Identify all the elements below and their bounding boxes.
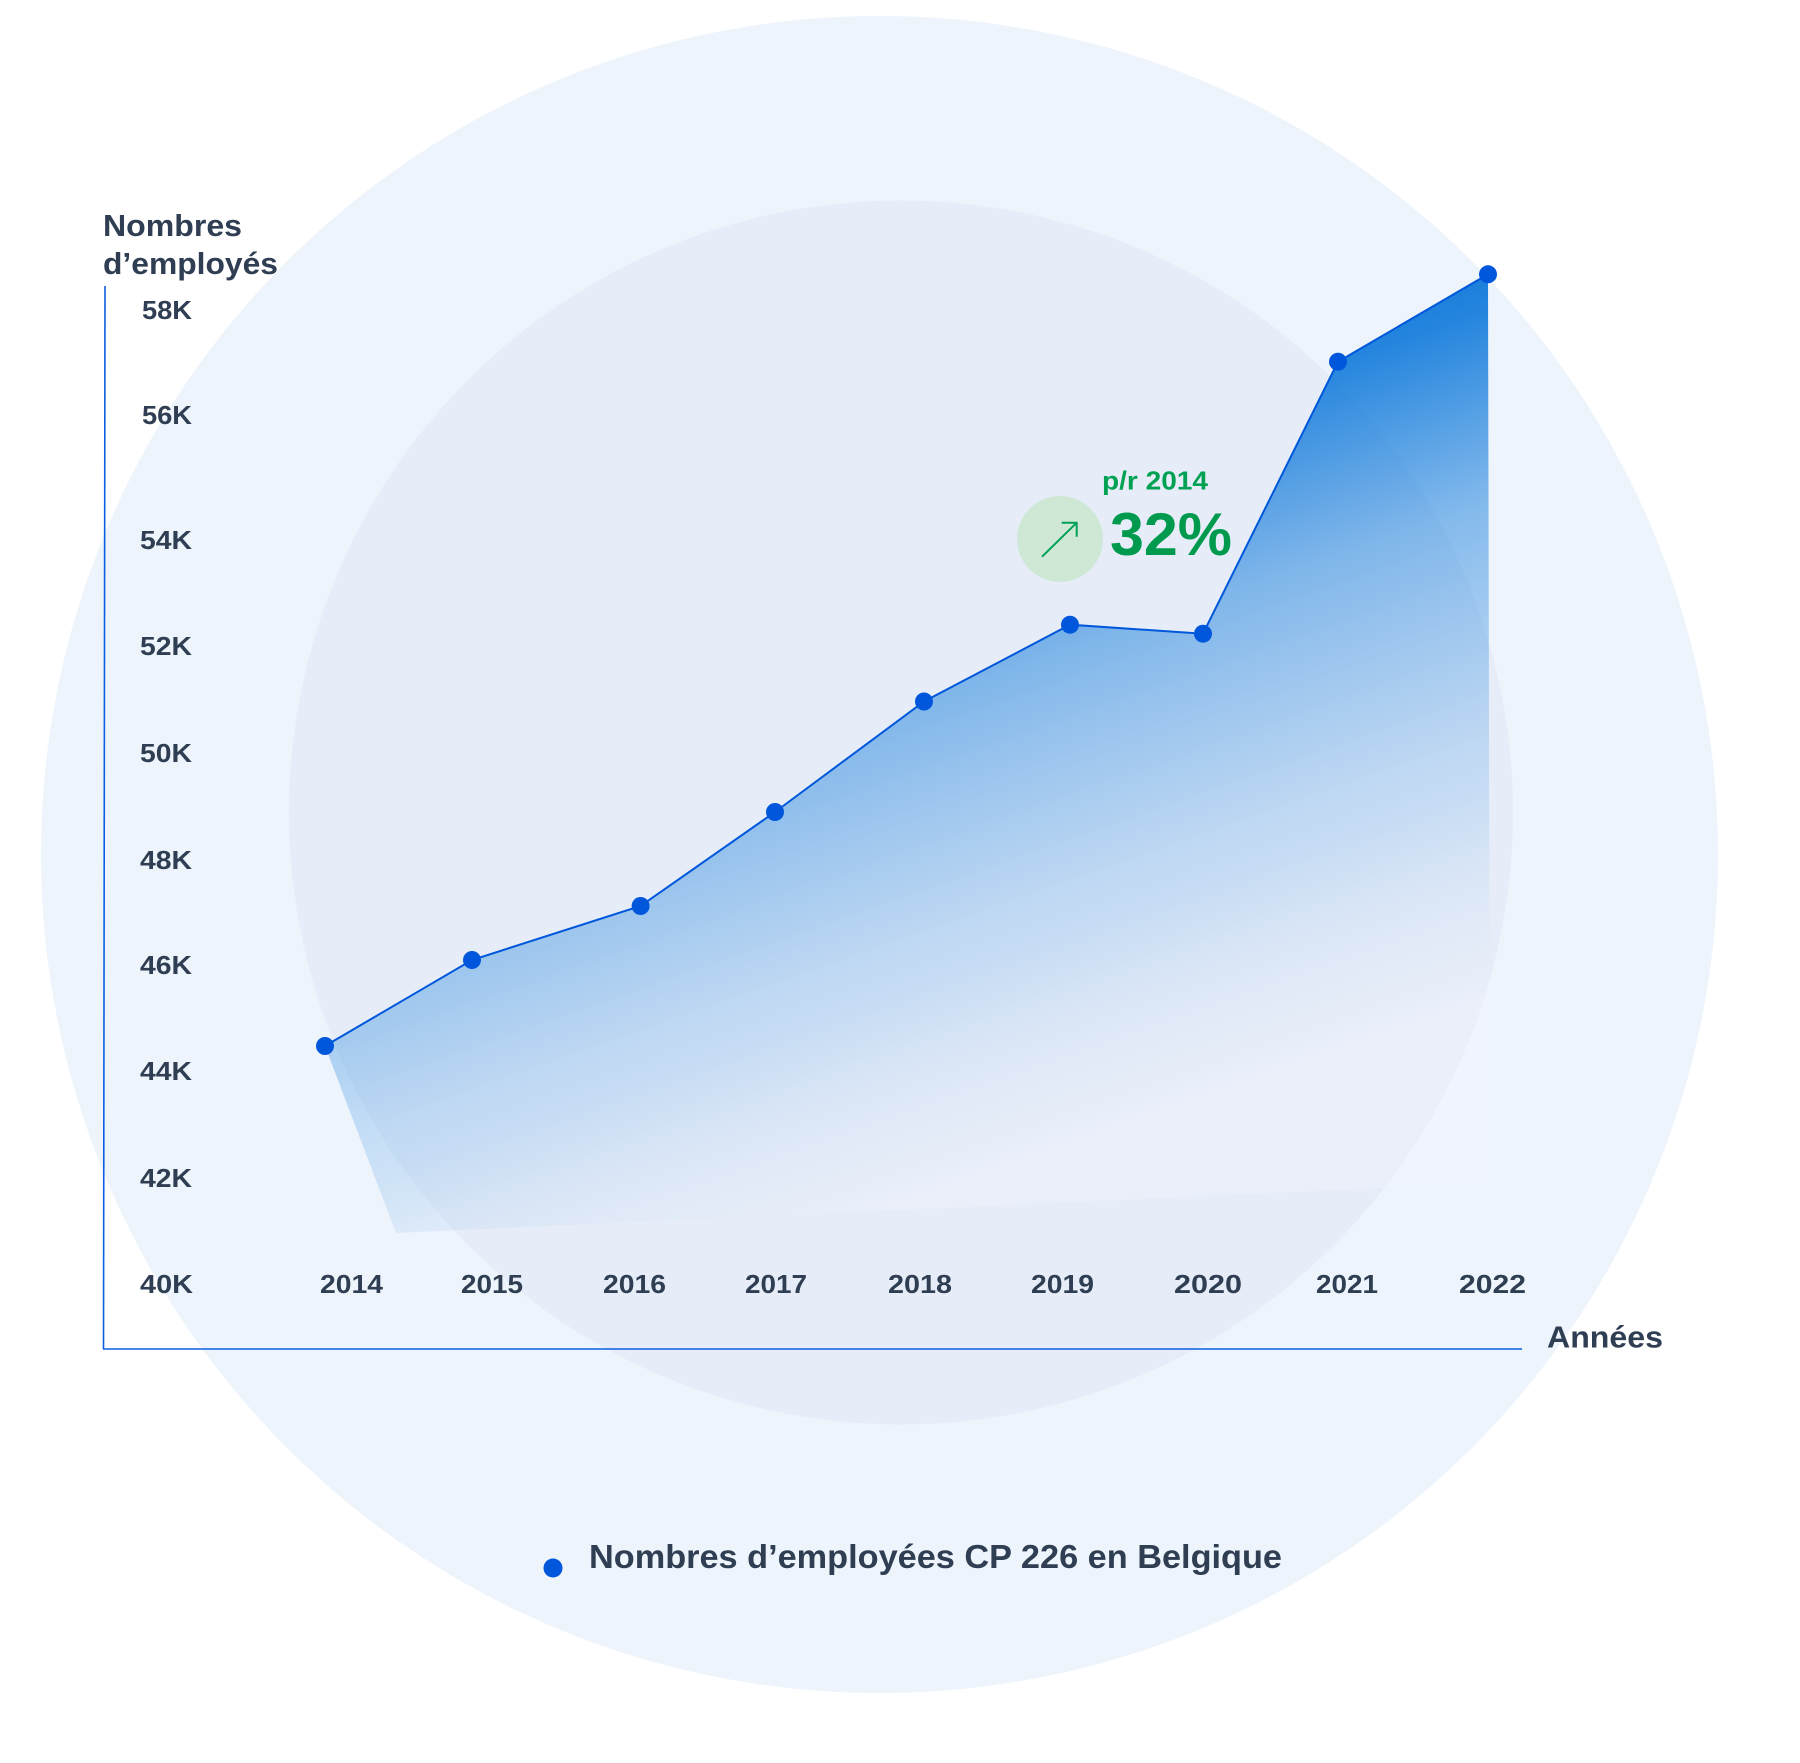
y axis labels: 46K bbox=[140, 950, 192, 980]
x axis labels: 2016 bbox=[603, 1269, 666, 1299]
y axis title bbox=[103, 208, 278, 281]
legend bbox=[544, 1538, 1282, 1578]
legend marker bbox=[544, 1558, 562, 1578]
y axis title: Nombres bbox=[103, 208, 242, 243]
x axis labels: 2022 bbox=[1459, 1269, 1526, 1299]
icon: up-right arrow in circle bbox=[1017, 496, 1103, 582]
y axis labels: 48K bbox=[140, 845, 192, 875]
x axis labels: 2020 bbox=[1174, 1269, 1242, 1299]
x axis title: Années bbox=[1547, 1320, 1663, 1354]
y axis labels: 54K bbox=[140, 525, 192, 555]
data points bbox=[316, 265, 1497, 1055]
y axis labels: 42K bbox=[140, 1163, 192, 1193]
callout caption: p/r 2014 bbox=[1102, 466, 1209, 496]
data line bbox=[325, 274, 1488, 1046]
y axis labels: 58K bbox=[142, 295, 192, 325]
x axis labels: 2015 bbox=[461, 1269, 523, 1299]
callout value: 32% bbox=[1110, 501, 1232, 568]
y axis line bbox=[104, 286, 105, 1349]
x axis labels: 2021 bbox=[1316, 1269, 1378, 1299]
y axis labels: 52K bbox=[140, 631, 192, 661]
y axis labels: 56K bbox=[142, 400, 192, 430]
area chart fill bbox=[325, 274, 1490, 1233]
x axis line bbox=[103, 1348, 1522, 1350]
x axis labels: 2018 bbox=[888, 1269, 952, 1299]
callout: growth since 2014 bbox=[1017, 466, 1232, 582]
x axis labels bbox=[320, 1269, 1526, 1299]
y axis labels: 40K bbox=[140, 1269, 193, 1299]
y axis labels bbox=[140, 295, 193, 1299]
y axis labels: 50K bbox=[140, 738, 192, 768]
y axis title: d’employés bbox=[103, 246, 278, 281]
x axis labels: 2017 bbox=[745, 1269, 807, 1299]
x axis labels: 2014 bbox=[320, 1269, 384, 1299]
background: inner circle bbox=[289, 200, 1513, 1424]
x axis labels: 2019 bbox=[1031, 1269, 1094, 1299]
legend label: Nombres d’employées CP 226 en Belgique bbox=[589, 1538, 1282, 1575]
y axis labels: 44K bbox=[140, 1056, 192, 1086]
